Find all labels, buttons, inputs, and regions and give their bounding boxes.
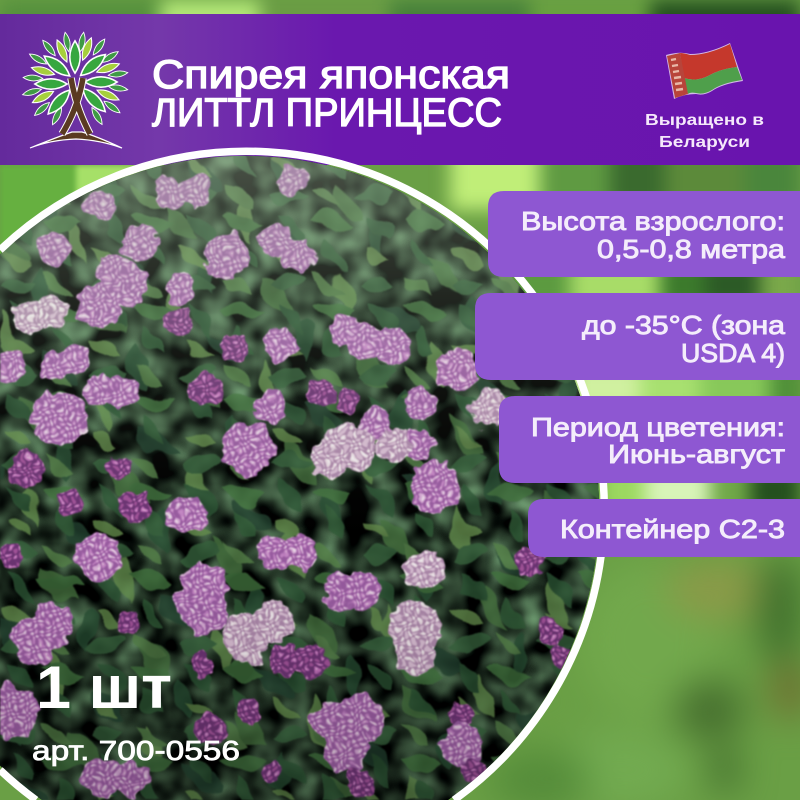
text: grown in Belarus: Беларуси	[659, 134, 750, 151]
plant photo in circle	[0, 130, 640, 800]
panel: adult height: 0,5-0,8 метра	[597, 234, 786, 264]
outer leaves	[22, 32, 128, 126]
panel: container: Контейнер С2-3	[560, 514, 785, 544]
panel: adult height	[488, 191, 800, 277]
article number: арт. 700-0556	[32, 735, 240, 766]
panel: frost hardiness	[475, 293, 800, 380]
quantity: 1 шт	[36, 654, 172, 721]
panel: frost hardiness: до -35°С (зона	[582, 310, 786, 340]
panel: flowering period: Июнь-август	[608, 439, 785, 469]
panel: flowering period: Период цветения:	[531, 412, 785, 442]
title	[152, 53, 510, 135]
text: grown in Belarus	[645, 112, 764, 151]
logo: tree	[22, 32, 128, 148]
panel: flowering period	[499, 396, 800, 483]
title: ЛИТТЛ ПРИНЦЕСС	[152, 91, 502, 135]
pink flower clusters	[0, 165, 574, 798]
text: grown in Belarus: Выращено в	[645, 112, 764, 129]
panel: frost hardiness: USDA 4)	[681, 338, 785, 368]
left corner	[0, 165, 136, 285]
header band	[0, 14, 800, 165]
panel: container	[528, 499, 800, 557]
icon: flag of Belarus	[666, 43, 743, 99]
title: Спирея японская	[152, 53, 510, 97]
panel: adult height: Высота взрослого:	[521, 206, 785, 236]
